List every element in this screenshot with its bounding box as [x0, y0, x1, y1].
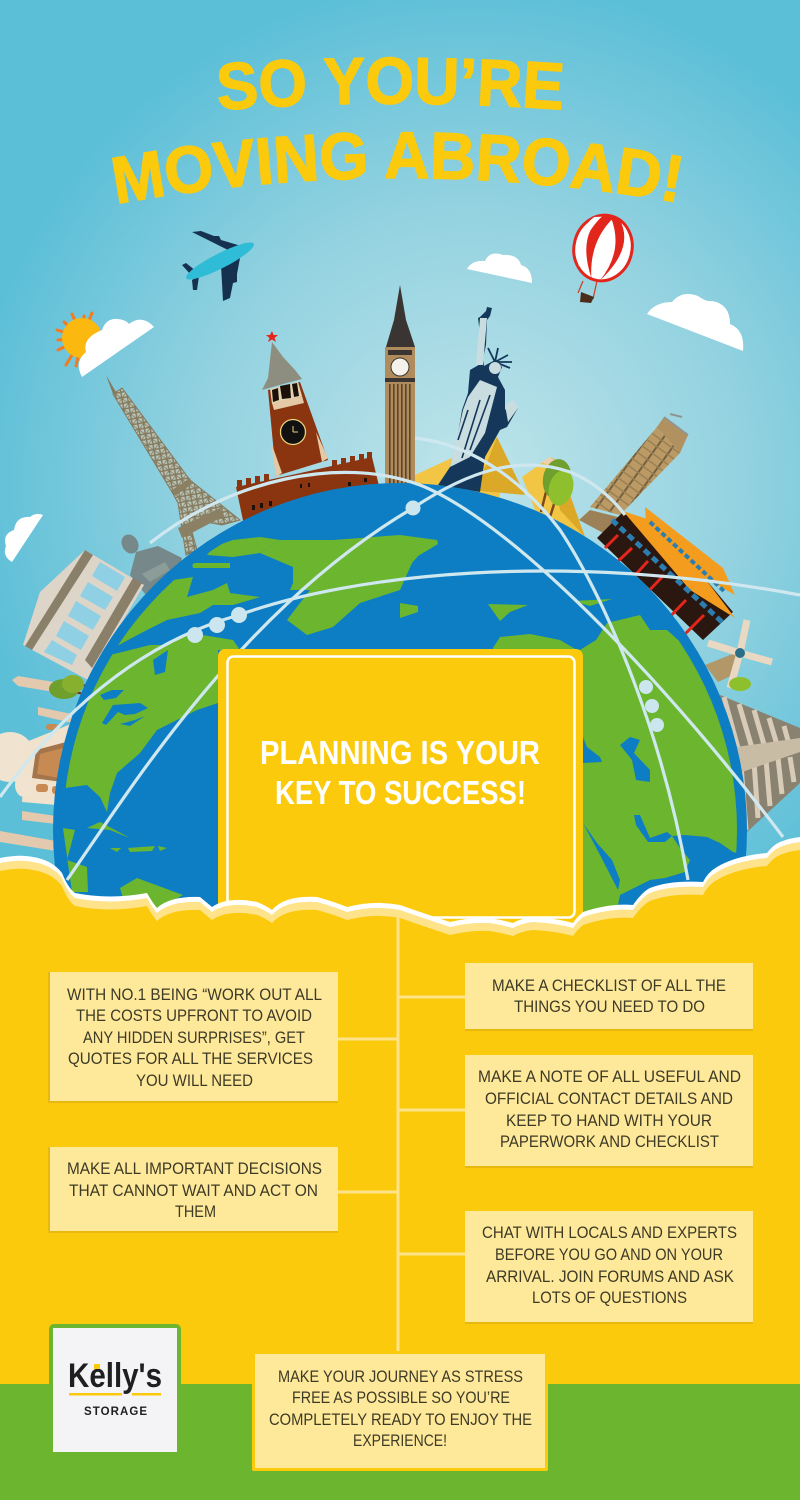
- panel: chat with locals: [465, 1211, 753, 1324]
- landmark: Leaning Tower of Pisa: [579, 414, 688, 535]
- panel: get quotes: QUOTES FOR ALL THE SERVICES: [68, 1049, 313, 1068]
- landmark: tree left: [49, 675, 96, 699]
- title: SO YOU’RE: [218, 56, 563, 110]
- panel: checklist: [465, 963, 753, 1031]
- panel: chat with locals: CHAT WITH LOCALS AND EXPERTS: [482, 1223, 737, 1242]
- panel: contact details: OFFICIAL CONTACT DETAILS AND: [485, 1089, 733, 1108]
- icon: cloud top: [467, 253, 532, 283]
- landmark: Eiffel Tower: [106, 375, 240, 555]
- globe: [53, 483, 747, 912]
- landmark: trees by pyramids: [540, 457, 577, 517]
- heading: planning is your key to success: KEY TO SUCCESS!: [275, 774, 526, 811]
- icon: cloud right: [647, 294, 743, 351]
- panel: important decisions: [48, 1147, 338, 1233]
- landmark: Big Ben: [385, 285, 415, 490]
- heading: planning is your key to success: PLANNING IS YOUR: [260, 734, 540, 771]
- landmark: Taj Mahal: [0, 676, 76, 851]
- globe land masses: [63, 535, 750, 912]
- panel: planning heading: [218, 649, 583, 929]
- icon: plane: [182, 231, 257, 301]
- panel: stress free journey: [252, 1351, 548, 1471]
- panel: stress free journey: COMPLETELY READY TO ENJOY THE: [269, 1410, 532, 1429]
- landmark: Chinese pagoda: [597, 507, 735, 640]
- logo: Kelly's Storage: STORAGE: [84, 1406, 147, 1418]
- panel: get quotes: ANY HIDDEN SURPRISES”, GET: [83, 1028, 305, 1047]
- icon: hot air balloon: [567, 209, 639, 303]
- panel: get quotes: THE COSTS UPFRONT TO AVOID: [76, 1006, 312, 1025]
- cloud edge yellow ground: [0, 837, 800, 1500]
- panel: get quotes: WITH NO.1 BEING “WORK OUT ALL: [67, 985, 322, 1004]
- icon: sun: [57, 313, 102, 366]
- panel: chat with locals: BEFORE YOU GO AND ON YOUR: [495, 1245, 723, 1264]
- landmark: Buddha statue: [118, 531, 182, 600]
- panel: contact details: [465, 1055, 753, 1168]
- landmark: classical building: [23, 550, 144, 680]
- panel: contact details: KEEP TO HAND WITH YOUR: [506, 1111, 712, 1130]
- panel: checklist: MAKE A CHECKLIST OF ALL THE: [492, 976, 726, 995]
- panel: stress free journey: EXPERIENCE!: [353, 1431, 447, 1450]
- route dots: [187, 500, 664, 732]
- title: MOVING ABROAD!: [112, 132, 682, 204]
- route lines: [0, 438, 800, 880]
- logo: Kelly's Storage: [49, 1324, 181, 1456]
- landmark: Statue of Liberty: [438, 307, 518, 492]
- panel: contact details: MAKE A NOTE OF ALL USEFUL AND: [478, 1067, 741, 1086]
- panel: get quotes: [48, 972, 338, 1103]
- panel: contact details: PAPERWORK AND CHECKLIST: [500, 1132, 719, 1151]
- globe ocean: [53, 483, 747, 1177]
- panel: checklist: THINGS YOU NEED TO DO: [514, 997, 705, 1016]
- icon: cloud with sun: [79, 319, 154, 377]
- landmark: pyramids: [415, 437, 585, 537]
- connector lines: [338, 912, 465, 1352]
- panel: chat with locals: LOTS OF QUESTIONS: [532, 1288, 687, 1307]
- panel: chat with locals: ARRIVAL. JOIN FORUMS AND ASK: [486, 1267, 735, 1286]
- landmark: windmill: [705, 620, 772, 691]
- globe seas: [100, 650, 745, 905]
- green ground strip: [0, 1384, 800, 1500]
- landmark: stepped skyscraper: [720, 695, 800, 832]
- icon: cloud left: [5, 514, 43, 562]
- panel: important decisions: THEM: [175, 1202, 216, 1221]
- title: [112, 56, 682, 204]
- landmark: Spasskaya tower and Kremlin wall: [236, 331, 380, 530]
- panel: get quotes: YOU WILL NEED: [136, 1071, 253, 1090]
- panel: important decisions: THAT CANNOT WAIT AND ACT ON: [69, 1181, 318, 1200]
- panel: important decisions: MAKE ALL IMPORTANT DECISIONS: [67, 1159, 322, 1178]
- logo: Kelly's Storage: Kelly's: [68, 1357, 162, 1395]
- panel: stress free journey: MAKE YOUR JOURNEY AS STRESS: [278, 1367, 523, 1386]
- panel: stress free journey: FREE AS POSSIBLE SO YOU’RE: [292, 1388, 510, 1407]
